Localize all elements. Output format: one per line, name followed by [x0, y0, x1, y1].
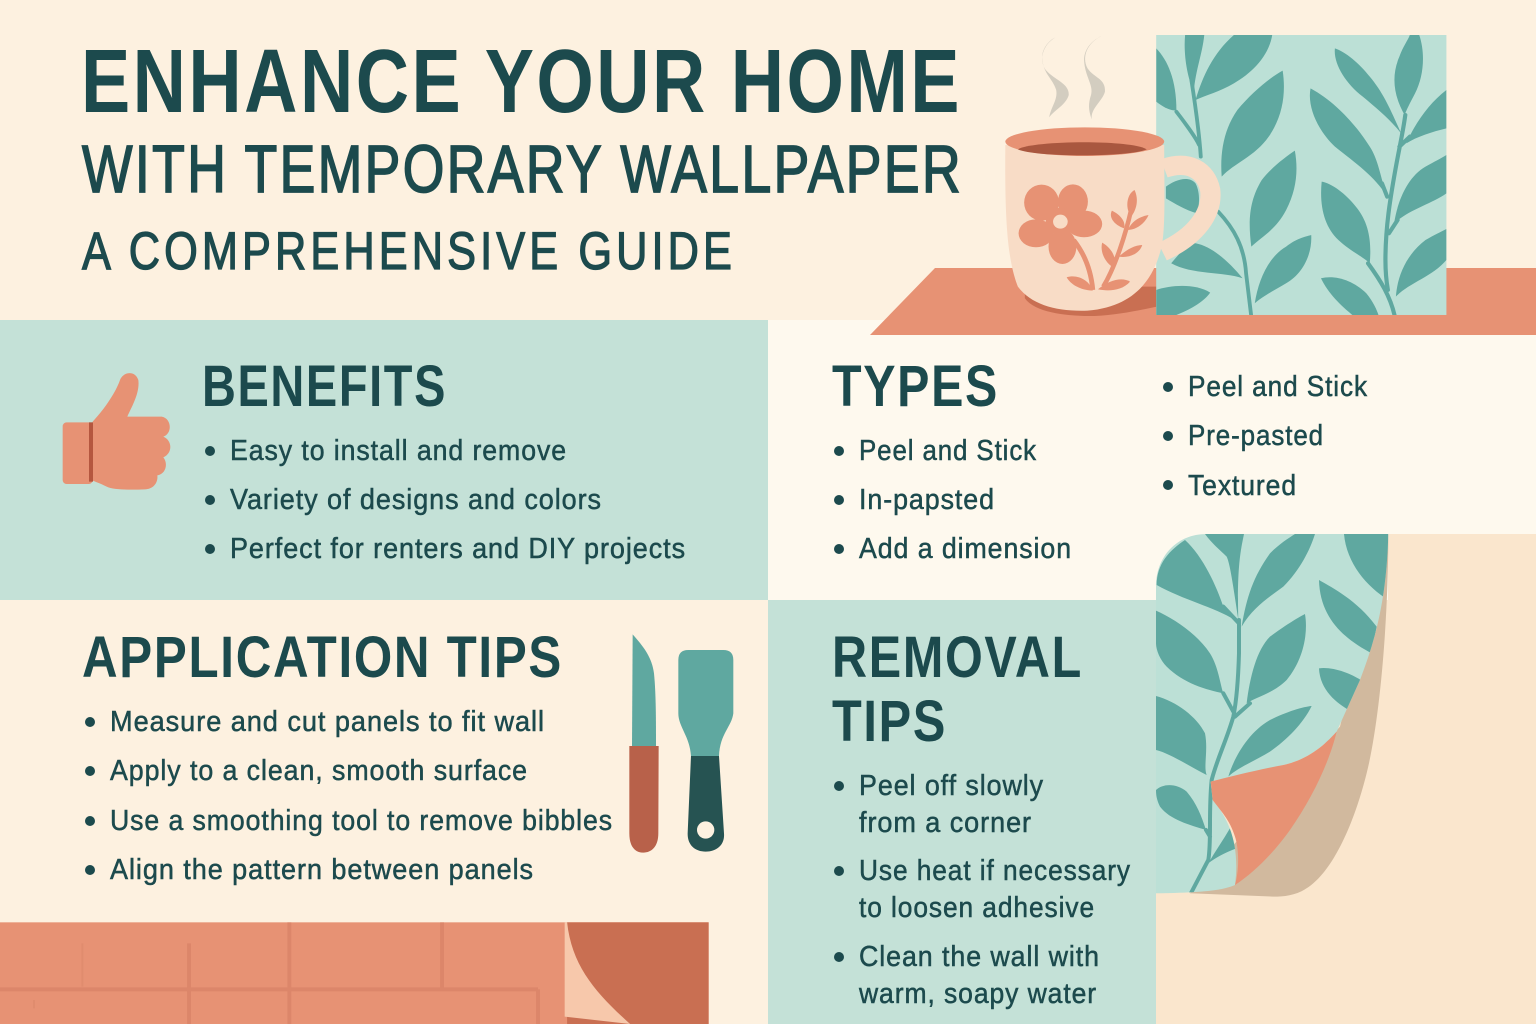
title: WITH TEMPORARY WALLPAPER [82, 132, 963, 207]
list: removal tips: Use heat if necessary [859, 855, 1131, 887]
heading: application tips: APPLICATION TIPS [82, 625, 563, 690]
wallpaper sample [1156, 35, 1446, 317]
list: removal tips: Clean the wall with [859, 941, 1100, 973]
wallpaper pattern [1156, 534, 1388, 895]
panel: types [832, 354, 1368, 565]
title: ENHANCE YOUR HOME [81, 32, 962, 132]
heading: removal tips: TIPS [832, 689, 947, 754]
mug flower [1019, 184, 1149, 291]
panel: benefits [0, 320, 768, 600]
title [81, 32, 963, 281]
list: removal tips: Peel off slowly [859, 770, 1044, 802]
list: application tips [85, 706, 613, 886]
icon: utility knife [629, 634, 659, 853]
list: types right column: Textured [1188, 470, 1297, 502]
illustration: peeling wallpaper [1156, 534, 1388, 897]
panel: types background [768, 320, 1536, 600]
list: types left column [834, 435, 1072, 565]
mug [1005, 127, 1210, 311]
panel: application tips [82, 625, 733, 886]
list: removal tips [834, 770, 1131, 1010]
list: application tips: Apply to a clean, smooth surface [110, 755, 528, 787]
panel: wall background [1156, 534, 1536, 1024]
mug shadow [1025, 287, 1157, 316]
heading: removal tips [832, 625, 1083, 754]
title: A COMPREHENSIVE GUIDE [82, 222, 736, 281]
icon: smoothing tool [678, 650, 733, 852]
list: types left column: Peel and Stick [859, 435, 1037, 467]
illustration: shelf [870, 268, 1536, 335]
list: application tips: Align the pattern between panels [110, 854, 534, 886]
peeled salmon corner [1211, 732, 1337, 885]
list: types right column: Pre-pasted [1188, 420, 1324, 452]
list: types right column: Peel and Stick [1188, 371, 1368, 403]
panel: removal tips [768, 600, 1156, 1024]
list: types left column: In-papsted [859, 484, 995, 516]
heading: types: TYPES [832, 354, 999, 419]
list: benefits: Easy to install and remove [230, 435, 567, 467]
illustration: mug and wallpaper sample [1005, 35, 1446, 317]
list: types right column [1163, 371, 1368, 502]
list: application tips: Measure and cut panels to fit wall [110, 706, 545, 738]
list: benefits [205, 435, 686, 565]
icon: thumbs up [63, 373, 170, 490]
steam [1042, 36, 1105, 119]
heading: removal tips: REMOVAL [832, 625, 1083, 690]
list: benefits: Perfect for renters and DIY projects [230, 533, 686, 565]
peeled backing [1190, 534, 1388, 897]
list: removal tips: from a corner [859, 807, 1032, 839]
list: benefits: Variety of designs and colors [230, 484, 602, 516]
list: removal tips: warm, soapy water [858, 978, 1097, 1010]
list: removal tips: to loosen adhesive [859, 892, 1095, 924]
illustration: brick wall with peeling corner [0, 922, 709, 1024]
heading: benefits: BENEFITS [202, 354, 447, 419]
list: application tips: Use a smoothing tool to remove bibbles [110, 805, 613, 837]
list: types left column: Add a dimension [859, 533, 1072, 565]
